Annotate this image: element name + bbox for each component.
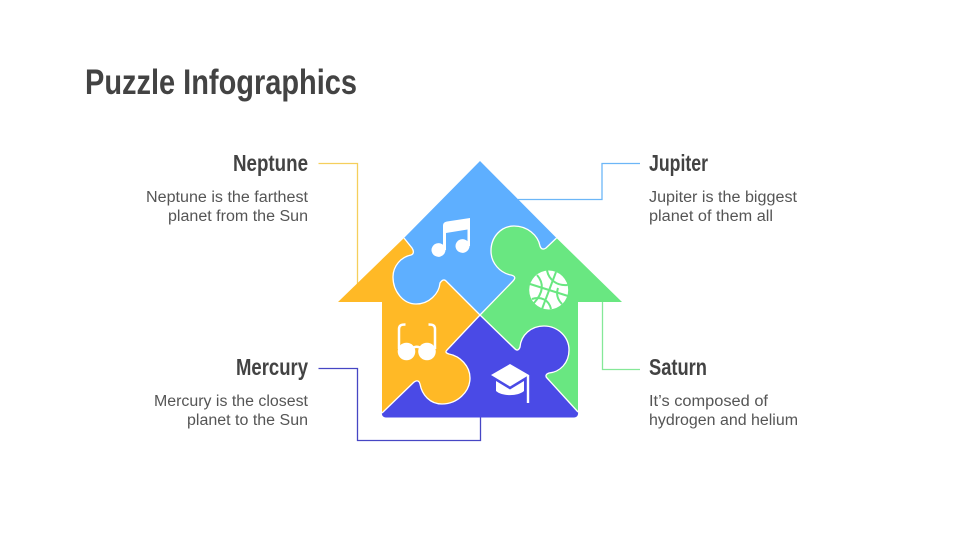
piece: green [480, 226, 622, 412]
heading: Jupiter [649, 150, 708, 176]
description: hydrogen and helium [649, 412, 798, 429]
description: Neptune is the farthest [146, 189, 309, 206]
icon: glasses [398, 324, 436, 360]
icon: music notes [430, 218, 471, 258]
connector: Mercury [318, 368, 480, 440]
seams [382, 226, 578, 413]
heading: Saturn [649, 354, 707, 380]
piece: purple [382, 315, 578, 418]
connector: Neptune [318, 164, 358, 285]
connector: Jupiter [518, 164, 640, 200]
piece: blue [393, 161, 556, 315]
house puzzle [338, 161, 622, 418]
block: Neptune [146, 150, 309, 225]
block: Jupiter [649, 150, 798, 225]
description: planet from the Sun [168, 208, 308, 225]
title: Puzzle Infographics [85, 63, 357, 102]
connector: Saturn [602, 302, 640, 370]
description: Mercury is the closest [154, 393, 309, 410]
description: Jupiter is the biggest [649, 189, 798, 206]
icon: graduation cap [491, 364, 529, 403]
description: planet to the Sun [187, 412, 308, 429]
heading: Neptune [233, 150, 308, 176]
piece: orange [338, 238, 480, 413]
block: Saturn [649, 354, 798, 429]
heading: Mercury [236, 354, 308, 380]
icon: basketball [529, 270, 568, 310]
description: planet of them all [649, 208, 773, 225]
description: It’s composed of [649, 393, 769, 410]
block: Mercury [154, 354, 309, 429]
